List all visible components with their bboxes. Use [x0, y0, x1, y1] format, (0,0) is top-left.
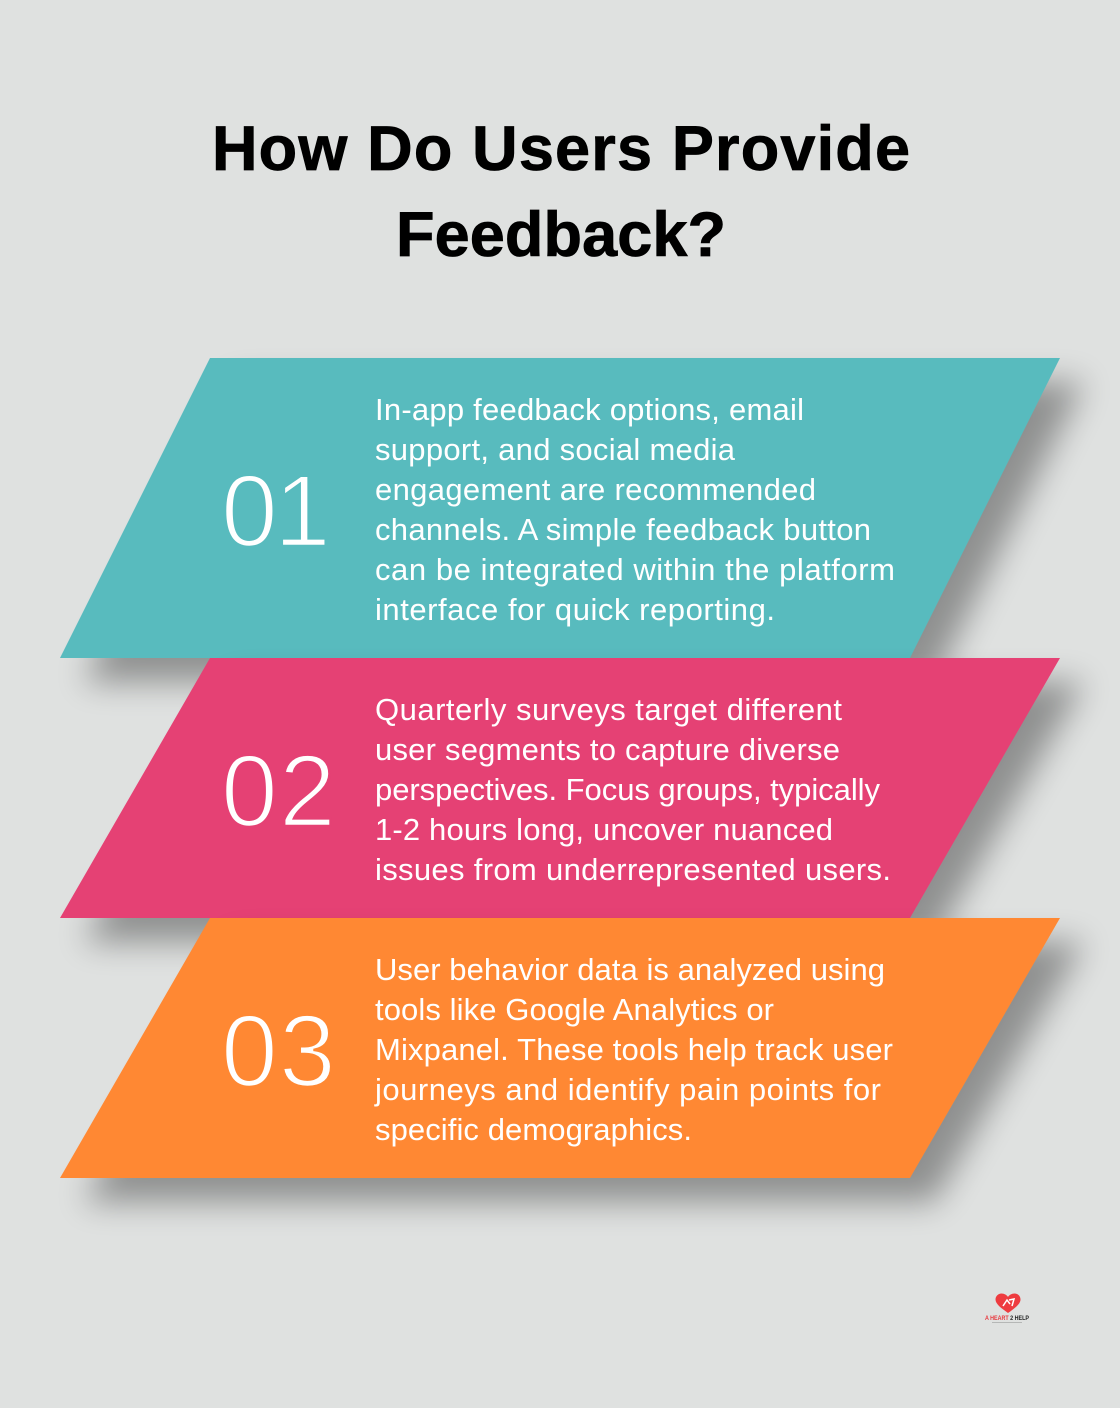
- title: How Do Users Provide: [212, 114, 910, 184]
- title: Feedback?: [396, 200, 726, 270]
- text block 03: tools like Google Analytics or: [375, 992, 774, 1027]
- pink parallelogram: [60, 658, 1060, 918]
- text block 02: issues from underrepresented users.: [375, 852, 891, 887]
- logo: A Heart 2 Help: [985, 1294, 1029, 1323]
- text block 01: [375, 392, 895, 627]
- text block 01: In-app feedback options, email: [375, 392, 804, 427]
- logo tagline: [992, 1322, 1022, 1323]
- text block 03: journeys and identify pain points for: [374, 1072, 881, 1107]
- orange parallelogram: [60, 918, 1060, 1178]
- panel: step 01: [60, 358, 1060, 658]
- text block 03: specific demographics.: [375, 1112, 692, 1147]
- text block 01: can be integrated within the platform: [375, 552, 895, 587]
- text block 02: user segments to capture diverse: [375, 732, 840, 767]
- panel: step 03: [60, 918, 1060, 1178]
- text block 01: support, and social media: [375, 432, 736, 467]
- title: [212, 114, 910, 270]
- logo wordmark: A HEART 2 HELP: [985, 1315, 1029, 1322]
- teal parallelogram: [60, 358, 1060, 658]
- text block 02: perspectives. Focus groups, typically: [375, 772, 880, 807]
- number 01: 01: [221, 454, 331, 568]
- text block 01: channels. A simple feedback button: [375, 512, 871, 547]
- number 02: 02: [221, 734, 336, 848]
- text block 03: [374, 952, 893, 1147]
- text block 02: [375, 692, 891, 887]
- number 03: 03: [221, 994, 336, 1108]
- text block 01: engagement are recommended: [375, 472, 816, 507]
- text block 01: interface for quick reporting.: [375, 592, 775, 627]
- text block 02: Quarterly surveys target different: [375, 692, 842, 727]
- text block 03: Mixpanel. These tools help track user: [375, 1032, 893, 1067]
- icon: heart: [996, 1294, 1020, 1313]
- text block 03: User behavior data is analyzed using: [375, 952, 885, 987]
- text block 02: 1-2 hours long, uncover nuanced: [375, 812, 833, 847]
- panel: step 02: [60, 658, 1060, 918]
